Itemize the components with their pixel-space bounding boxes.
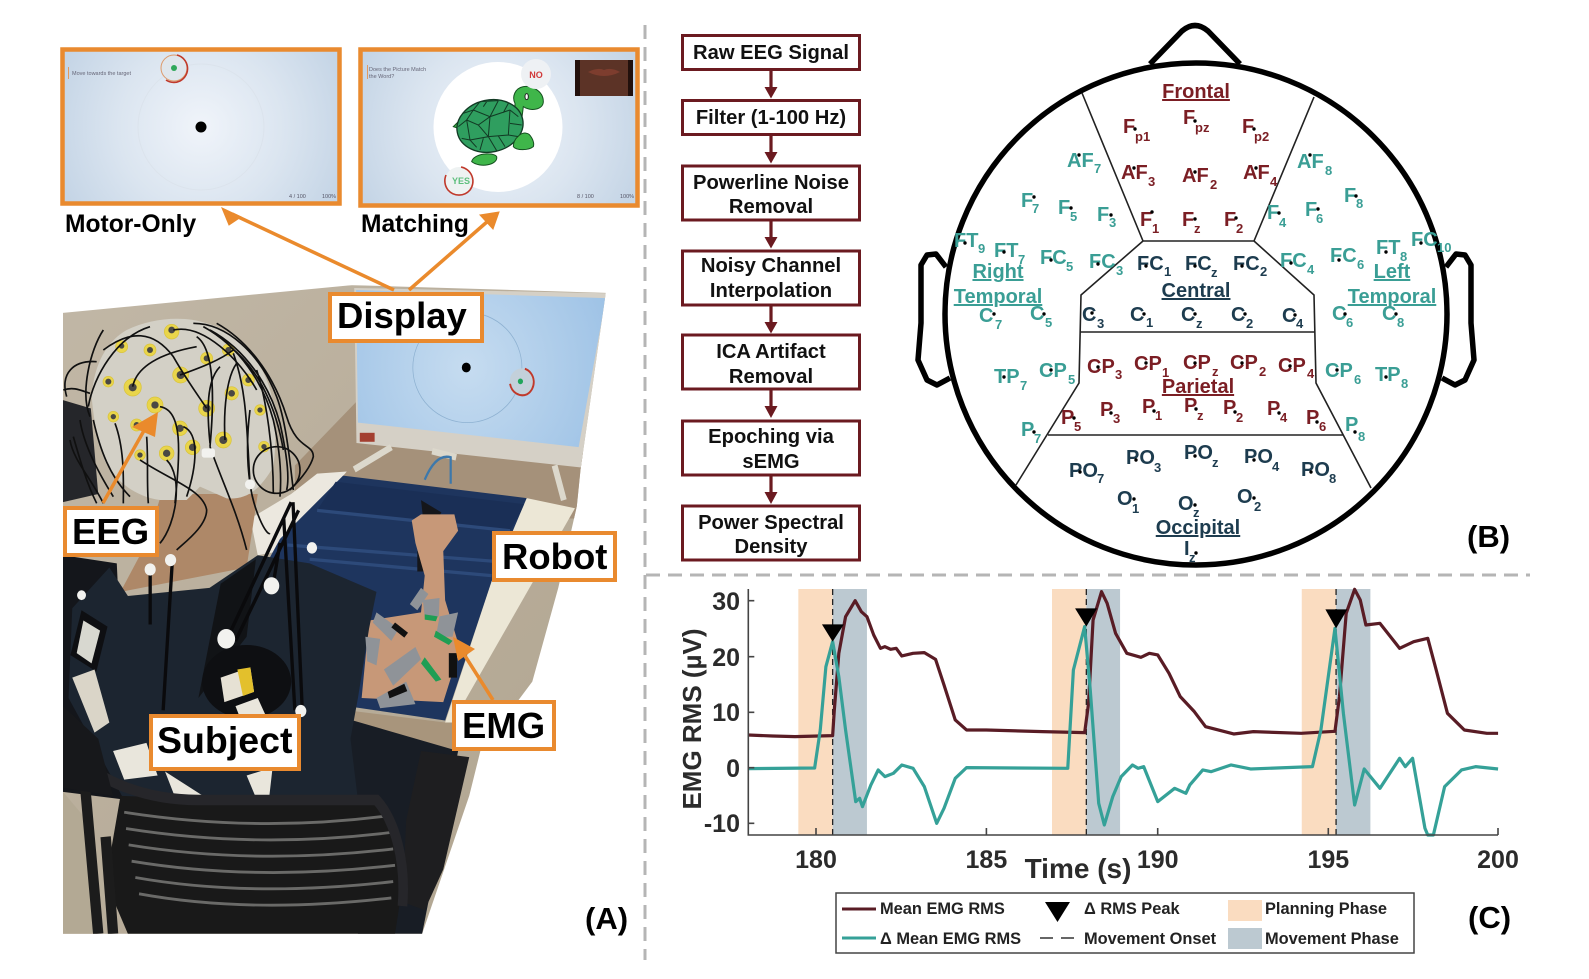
- frontal electrodes: 2: [1236, 221, 1243, 236]
- occipital electrodes: z: [1193, 505, 1200, 520]
- frontal electrodes: 4: [1270, 174, 1278, 189]
- region heading: Frontal: Frontal: [1162, 81, 1230, 103]
- legend: movement phase: [1228, 928, 1399, 949]
- step: Powerline Noise Removal: [682, 166, 860, 220]
- temporal electrodes: 3: [1109, 215, 1116, 230]
- step: Noisy Channel Interpolation: Interpolation: [710, 280, 832, 302]
- temporal electrodes: C: [1332, 303, 1346, 325]
- frontal electrodes: p2: [1254, 129, 1269, 144]
- temporal electrodes: 5: [1045, 315, 1052, 330]
- screenshot: matching task: 100%: [620, 194, 634, 200]
- region heading: Occipital: Occipital: [1156, 517, 1240, 539]
- occipital electrodes: 1: [1132, 501, 1139, 516]
- temporal electrodes: F: [1058, 197, 1070, 219]
- arm: [362, 514, 460, 702]
- shirt: [69, 555, 376, 800]
- robot tray: [269, 476, 527, 720]
- screenshot: matching task: Does the Picture Match: [369, 67, 426, 73]
- step: Powerline Noise Removal: Powerline Noise: [693, 172, 849, 194]
- EMG sensors on arm: [365, 588, 458, 708]
- temporal electrodes: P: [1345, 414, 1358, 436]
- step: Epoching via sEMG: [682, 421, 860, 475]
- step: Filter: [682, 100, 860, 134]
- parietal electrodes: 2: [1236, 410, 1243, 425]
- flowchart: EEG processing pipeline: [682, 36, 860, 560]
- temporal electrodes: F: [1344, 185, 1356, 207]
- x-axis tick labels: 185: [966, 846, 1007, 874]
- x-axis tick labels: 200: [1477, 846, 1519, 874]
- frontal electrodes: 2: [1210, 177, 1217, 192]
- parietal electrodes: CP: [1183, 352, 1211, 374]
- step: Powerline Noise Removal: Removal: [729, 196, 813, 218]
- occipital electrodes: O: [1237, 486, 1253, 508]
- parietal electrodes: 1: [1162, 365, 1169, 380]
- legend: [836, 893, 1414, 953]
- axes and ticks: [748, 589, 1498, 835]
- central electrodes: 1: [1164, 264, 1171, 279]
- temporal electrodes: FT: [994, 240, 1018, 262]
- parietal electrodes: 1: [1155, 408, 1162, 423]
- central electrodes: FC: [1185, 253, 1212, 275]
- temporal electrodes: F: [1021, 190, 1033, 212]
- x-axis tick labels: 190: [1137, 846, 1179, 874]
- trousers under desk: [350, 720, 458, 934]
- temporal electrodes: AF: [1067, 150, 1094, 172]
- temporal electrodes: C: [1030, 303, 1044, 325]
- frontal electrodes: 1: [1152, 221, 1159, 236]
- temporal electrodes: 3: [1116, 263, 1123, 278]
- photo: subject at robot and monitor: [61, 282, 618, 939]
- cream side board: [445, 498, 575, 722]
- legend: planning phase: Planning Phase: [1265, 900, 1387, 918]
- temporal electrodes: 6: [1354, 372, 1361, 387]
- frontal electrodes: F: [1224, 209, 1236, 231]
- parietal electrodes: 5: [1074, 419, 1081, 434]
- occipital electrodes: PO: [1126, 447, 1155, 469]
- parietal electrodes: CP: [1278, 355, 1306, 377]
- temporal electrodes: 9: [978, 241, 985, 256]
- frontal electrodes: 3: [1148, 174, 1155, 189]
- step: Raw EEG Signal: Raw EEG Signal: [693, 42, 849, 64]
- callout: Subject: Subject: [157, 719, 293, 761]
- frontal electrodes: pz: [1195, 120, 1210, 135]
- central electrodes: 2: [1260, 264, 1267, 279]
- central electrodes: C: [1231, 304, 1245, 326]
- temporal electrodes: 10: [1437, 240, 1451, 255]
- step: Filter: Filter (1-100 Hz): [696, 107, 846, 129]
- electrode position dots: [965, 121, 1421, 553]
- step: Noisy Channel Interpolation: Noisy Channel: [701, 255, 841, 277]
- flow arrows: [764, 70, 778, 504]
- temporal electrodes: 6: [1357, 257, 1364, 272]
- frontal electrodes: AF: [1182, 165, 1209, 187]
- panel C: EMG time series chart: [677, 588, 1519, 953]
- temporal electrodes: FC: [1040, 247, 1067, 269]
- panel A: experimental setup: [61, 50, 637, 939]
- parietal electrodes: 2: [1259, 364, 1266, 379]
- temporal electrodes: 7: [1094, 161, 1101, 176]
- x-axis tick labels: 195: [1307, 846, 1349, 874]
- occipital electrodes: I: [1184, 538, 1190, 560]
- monitor: [354, 288, 608, 500]
- y-axis tick labels: -10: [704, 810, 740, 838]
- parietal electrodes: 6: [1319, 419, 1326, 434]
- temporal electrodes: FT: [954, 230, 978, 252]
- screenshot: motor-only task: 100%: [322, 194, 336, 200]
- callout: Robot: Robot: [502, 536, 607, 577]
- frontal electrodes: p1: [1135, 129, 1150, 144]
- trace: delta mean EMG RMS: [748, 627, 1498, 835]
- parietal electrodes: P: [1142, 396, 1155, 418]
- panel letter B: (B): [1467, 519, 1510, 554]
- callout: EMG: EMG: [462, 705, 545, 746]
- central electrodes: C: [1130, 304, 1144, 326]
- step: Noisy Channel Interpolation: [682, 251, 860, 305]
- parietal electrodes: P: [1267, 398, 1280, 420]
- legend: delta RMS peak: [1045, 900, 1180, 922]
- temporal electrodes: CP: [1039, 360, 1067, 382]
- screenshot: motor-only task: 4 / 100: [289, 194, 306, 200]
- temporal electrodes: TP: [994, 366, 1020, 388]
- y-axis title: EMG RMS (µV): [677, 628, 707, 810]
- y-axis tick labels: 30: [712, 588, 740, 616]
- occipital electrodes: PO: [1244, 446, 1273, 468]
- screenshot: motor-only task: [62, 50, 340, 204]
- occipital electrodes: PO: [1069, 460, 1098, 482]
- frontal electrodes: F: [1140, 209, 1152, 231]
- central electrodes: C: [1282, 305, 1296, 327]
- central electrodes: C: [1082, 304, 1096, 326]
- occipital electrodes: O: [1178, 493, 1194, 515]
- divider: vertical dashed: [644, 25, 646, 960]
- temporal electrodes: 8: [1397, 315, 1404, 330]
- neck: [120, 494, 258, 592]
- carpet: [63, 792, 95, 934]
- occipital electrodes: [1069, 442, 1336, 565]
- screenshot: matching task: [360, 50, 638, 206]
- step: Power Spectral Density: [682, 506, 860, 560]
- trace: mean EMG RMS: [748, 589, 1498, 737]
- temporal electrodes: 4: [1279, 215, 1287, 230]
- head outline with nose and ears: [918, 26, 1474, 565]
- y-axis tick labels: [704, 588, 740, 838]
- occipital electrodes: 7: [1097, 471, 1104, 486]
- divider: horizontal dashed: [646, 574, 1530, 576]
- movement phase bands: [833, 589, 1370, 835]
- temporal electrodes: 7: [1020, 378, 1027, 393]
- frontal electrodes: [1121, 107, 1278, 236]
- y-axis tick labels: 20: [712, 644, 740, 672]
- temporal electrodes: C: [979, 305, 993, 327]
- region heading: Right Temporal: Temporal: [954, 286, 1042, 308]
- movement onset lines: [833, 589, 1336, 835]
- screenshot: matching task: the Word?: [369, 74, 394, 80]
- occipital electrodes: 2: [1254, 499, 1261, 514]
- temporal electrodes: 7: [995, 317, 1002, 332]
- temporal electrodes: 7: [1032, 201, 1039, 216]
- temporal electrodes: TP: [1375, 364, 1401, 386]
- harness and cable bundle: [70, 502, 317, 802]
- frontal electrodes: F: [1242, 116, 1254, 138]
- occipital electrodes: O: [1117, 488, 1133, 510]
- callout: Display: Display: [337, 295, 468, 336]
- panel letter C: (C): [1468, 900, 1511, 935]
- region heading: Left Temporal: [1348, 261, 1436, 308]
- parietal electrodes: 3: [1115, 367, 1122, 382]
- parietal electrodes: P: [1184, 395, 1197, 417]
- arrow: EEG callout to electrode: [103, 412, 158, 503]
- legend: planning phase: [1228, 900, 1387, 921]
- plot area with traces: [748, 589, 1498, 835]
- region heading: Parietal: Parietal: [1162, 376, 1234, 398]
- central electrodes: 2: [1246, 316, 1253, 331]
- parietal electrodes: z: [1197, 408, 1204, 423]
- lips picture: [575, 60, 633, 96]
- temporal electrodes: 7: [1034, 431, 1041, 446]
- step: ICA Artifact Removal: [682, 335, 860, 389]
- y-axis tick labels: 0: [726, 755, 740, 783]
- temporal electrodes: F: [1097, 204, 1109, 226]
- temporal electrodes: 8: [1356, 196, 1363, 211]
- frontal electrodes: AF: [1243, 162, 1270, 184]
- parietal electrodes: [1061, 352, 1326, 434]
- occipital electrodes: 8: [1329, 471, 1336, 486]
- panel B: electrode head map: [918, 26, 1510, 565]
- temporal electrodes: C: [1382, 303, 1396, 325]
- temporal electrodes: 8: [1358, 429, 1365, 444]
- temporal electrodes: F: [1305, 199, 1317, 221]
- step: Power Spectral Density: Density: [735, 536, 808, 558]
- label: Matching: Matching: [361, 211, 469, 238]
- frontal electrodes: z: [1194, 221, 1201, 236]
- parietal electrodes: P: [1061, 407, 1074, 429]
- parietal electrodes: CP: [1134, 353, 1162, 375]
- temporal electrodes: 5: [1066, 259, 1073, 274]
- parietal electrodes: CP: [1087, 356, 1115, 378]
- temporal electrodes: FC: [1411, 229, 1438, 251]
- central electrodes: 3: [1097, 316, 1104, 331]
- chair: [80, 726, 408, 934]
- step: Epoching via sEMG: Epoching via: [708, 426, 835, 448]
- region heading: Left Temporal: Left: [1374, 261, 1411, 283]
- temporal electrodes: P: [1021, 419, 1034, 441]
- screenshot: matching task: NO: [529, 70, 543, 80]
- legend: movement phase: Movement Phase: [1265, 930, 1399, 948]
- region heading: Left Temporal: Temporal: [1348, 286, 1436, 308]
- parietal electrodes: 3: [1113, 411, 1120, 426]
- legend: movement onset: Movement Onset: [1084, 930, 1217, 948]
- temporal electrodes: CP: [1325, 360, 1353, 382]
- dark equipment left of head: [63, 400, 98, 502]
- temporal electrodes: 5: [1070, 209, 1077, 224]
- occipital electrodes: PO: [1184, 442, 1213, 464]
- occipital electrodes: z: [1212, 455, 1219, 470]
- x-axis tick labels: 180: [795, 846, 837, 874]
- central electrodes: C: [1181, 304, 1195, 326]
- temporal electrodes: 6: [1316, 211, 1323, 226]
- screenshot: motor-only task: Move towards the target: [72, 71, 131, 77]
- parietal electrodes: CP: [1230, 352, 1258, 374]
- temporal electrodes: [954, 150, 1451, 446]
- white desk surface: [250, 472, 347, 555]
- screenshot: matching task: 8 / 100: [577, 194, 594, 200]
- temporal electrodes: 6: [1346, 315, 1353, 330]
- desk behind monitor: [295, 400, 584, 518]
- legend: mean EMG RMS: Mean EMG RMS: [880, 900, 1005, 918]
- temporal electrodes: F: [1267, 202, 1279, 224]
- x-axis tick labels: [795, 846, 1519, 874]
- temporal electrodes: FC: [1089, 251, 1116, 273]
- dark clothing and cables at left: [63, 557, 122, 799]
- central electrodes: FC: [1233, 253, 1260, 275]
- temporal electrodes: 8: [1400, 249, 1407, 264]
- central electrodes: z: [1211, 265, 1218, 280]
- temporal electrodes: 8: [1401, 376, 1408, 391]
- frontal electrodes: F: [1123, 116, 1135, 138]
- temporal electrodes: FT: [1376, 237, 1400, 259]
- step: Power Spectral Density: Power Spectral: [698, 512, 844, 534]
- frontal electrodes: F: [1182, 209, 1194, 231]
- central electrodes: [1082, 253, 1304, 331]
- x-axis title: Time (s): [1025, 853, 1131, 884]
- central electrodes: 1: [1146, 315, 1153, 330]
- region heading: Right Temporal: Right: [972, 261, 1024, 283]
- step: Epoching via sEMG: sEMG: [742, 451, 800, 473]
- step: ICA Artifact Removal: ICA Artifact: [716, 341, 826, 363]
- legend: delta RMS peak: Δ RMS Peak: [1084, 900, 1180, 918]
- callout: EEG: EEG: [72, 511, 149, 552]
- step: ICA Artifact Removal: Removal: [729, 366, 813, 388]
- screenshot: matching task: YES: [452, 176, 470, 186]
- arrow: display to matching: [409, 212, 499, 290]
- temporal electrodes: 7: [1018, 252, 1025, 267]
- label: Motor-Only: Motor-Only: [65, 211, 196, 238]
- occipital electrodes: z: [1189, 550, 1196, 565]
- armrest: [428, 756, 470, 903]
- parietal electrodes: 4: [1307, 366, 1315, 381]
- arrow: EMG callout to sensor: [453, 637, 493, 700]
- temporal electrodes: 4: [1307, 262, 1315, 277]
- central electrodes: 4: [1296, 316, 1304, 331]
- central electrodes: FC: [1137, 253, 1164, 275]
- planning phase bands: [798, 589, 1336, 835]
- region heading: Central: Central: [1162, 280, 1230, 302]
- occipital electrodes: 4: [1272, 459, 1280, 474]
- occipital electrodes: 3: [1154, 460, 1161, 475]
- frontal electrodes: AF: [1121, 162, 1148, 184]
- parietal electrodes: P: [1100, 399, 1113, 421]
- temporal electrodes: FC: [1330, 245, 1357, 267]
- parietal electrodes: 4: [1280, 410, 1288, 425]
- region heading: Right Temporal: [954, 261, 1042, 308]
- region boundary lines: [1016, 93, 1371, 488]
- central electrodes: z: [1196, 316, 1203, 331]
- temporal electrodes: 5: [1068, 372, 1075, 387]
- desk front edge: [354, 712, 452, 750]
- legend: delta mean EMG RMS: Δ Mean EMG RMS: [880, 930, 1021, 948]
- parietal electrodes: z: [1212, 364, 1219, 379]
- occipital electrodes: PO: [1301, 459, 1330, 481]
- delta RMS peak markers: [822, 608, 1347, 642]
- temporal electrodes: 8: [1325, 163, 1332, 178]
- turtle picture: [452, 86, 543, 165]
- parietal electrodes: P: [1223, 397, 1236, 419]
- EEG cap with electrodes and wires: [63, 319, 313, 550]
- arrow: display to motor-only: [222, 208, 394, 290]
- step: Raw EEG Signal: [682, 36, 860, 70]
- parietal electrodes: P: [1306, 407, 1319, 429]
- panel letter A: (A): [585, 901, 628, 936]
- temporal electrodes: AF: [1297, 151, 1324, 173]
- y-axis tick labels: 10: [712, 699, 740, 727]
- frontal electrodes: F: [1183, 107, 1195, 129]
- temporal electrodes: FC: [1280, 250, 1307, 272]
